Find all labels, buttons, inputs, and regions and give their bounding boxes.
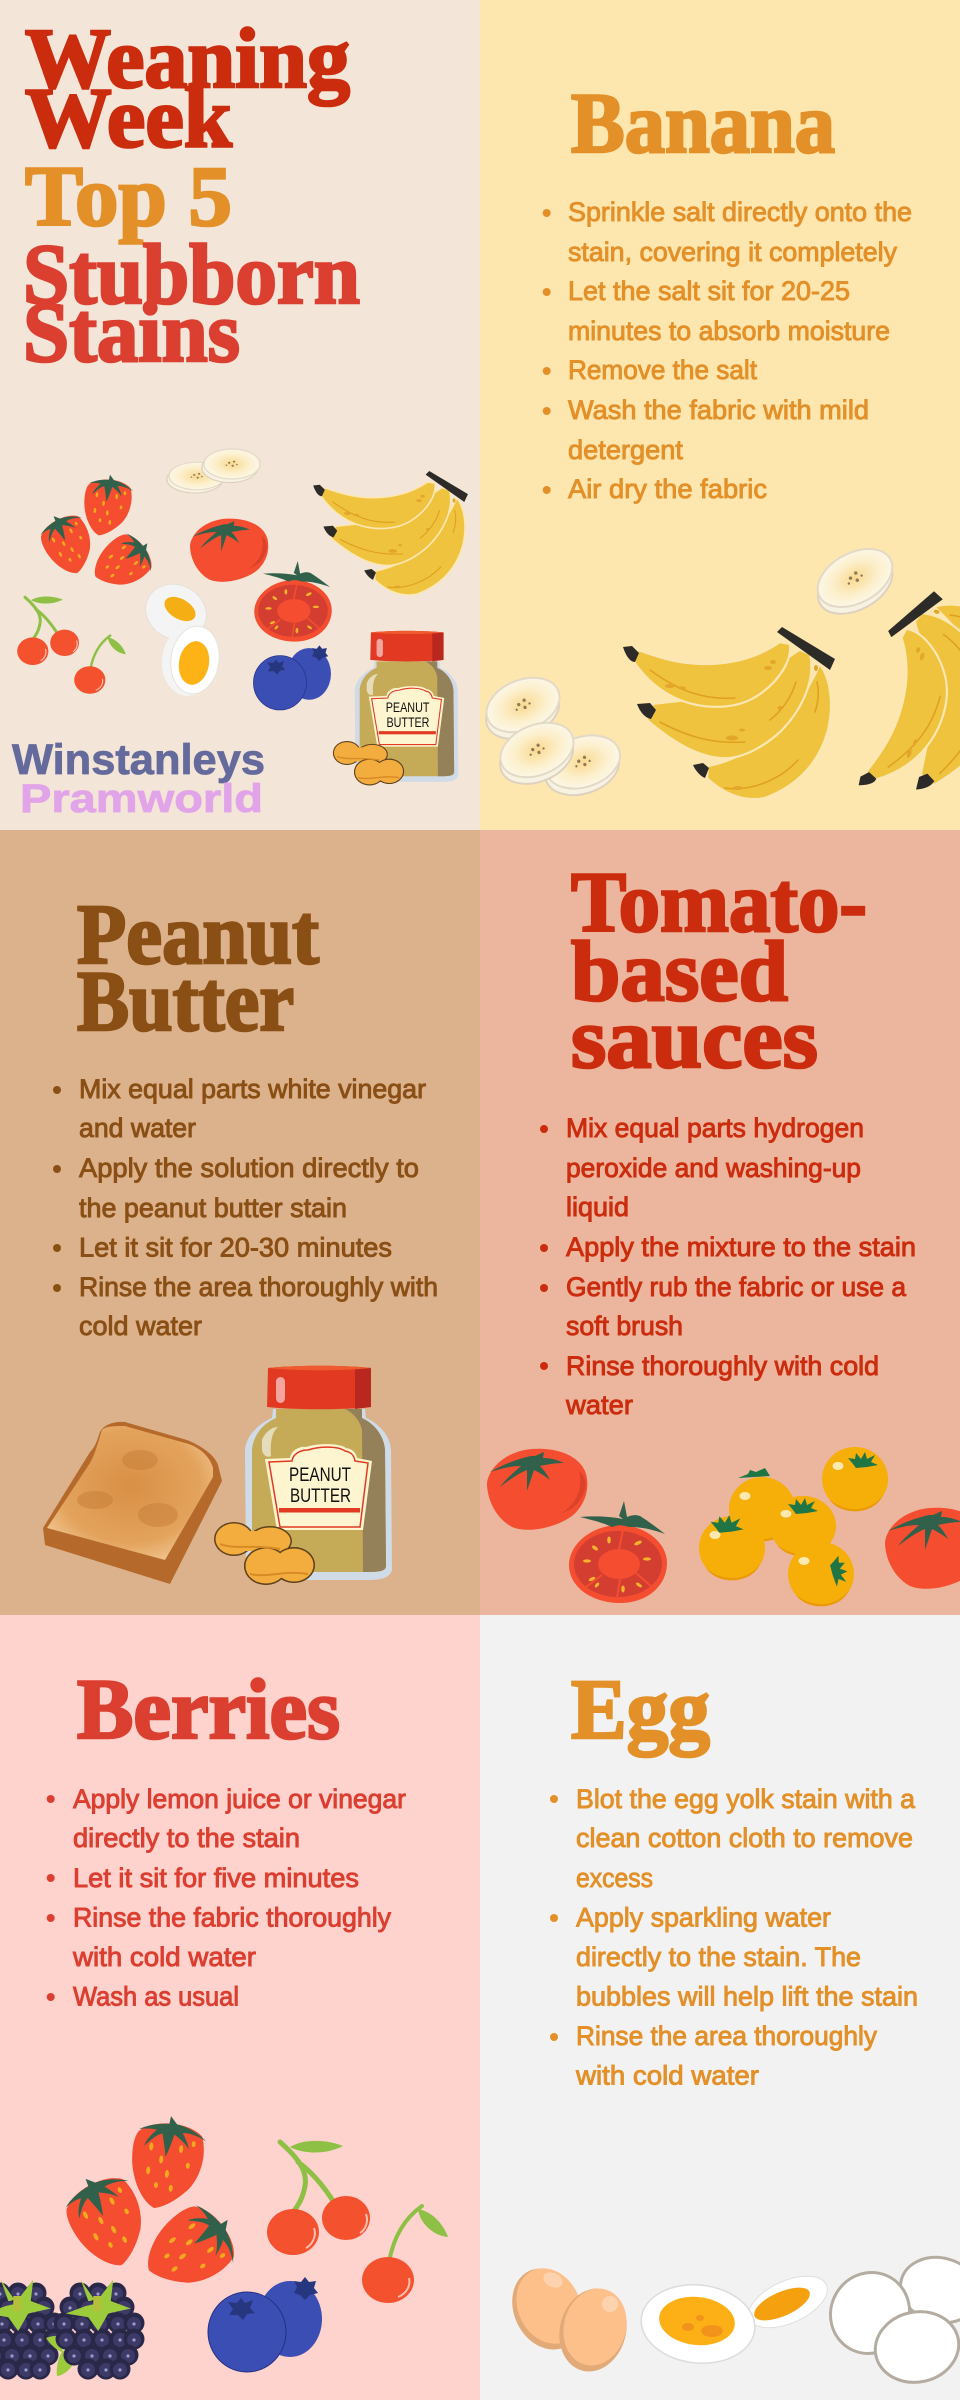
title: Stubborn Stains: Stubborn bbox=[23, 226, 360, 322]
panel: berries bbox=[0, 1615, 480, 2400]
icon: boiled eggs bbox=[136, 574, 223, 700]
list: banana steps: stain, covering it completely bbox=[568, 237, 898, 267]
list: tomato sauce steps: Mix equal parts hydrogen bbox=[566, 1113, 864, 1143]
heading: Peanut Butter: Peanut bbox=[77, 886, 319, 982]
list: egg steps: excess bbox=[576, 1863, 653, 1893]
heading: Tomato-based sauces: based bbox=[571, 923, 788, 1019]
icon: banana bunch bbox=[623, 627, 835, 799]
icon: strawberries bbox=[33, 473, 162, 600]
title: Weaning Week: Weaning bbox=[25, 10, 350, 106]
list: egg steps bbox=[550, 1784, 918, 2090]
panel: title bbox=[0, 0, 480, 830]
heading: Berries: Berries bbox=[77, 1661, 340, 1757]
list: banana steps bbox=[543, 197, 912, 504]
heading: Tomato-based sauces: Tomato- bbox=[571, 854, 867, 950]
list: berries steps: Rinse the fabric thoroughly bbox=[73, 1902, 392, 1932]
icon: peanut butter jar: BUTTER bbox=[386, 715, 430, 730]
icon: tomato cropped bbox=[885, 1508, 960, 1589]
list: egg steps: clean cotton cloth to remove bbox=[576, 1823, 913, 1853]
list: egg steps: with cold water bbox=[575, 2060, 759, 2090]
title: Stubborn Stains: Stains bbox=[23, 284, 240, 380]
list: banana steps: minutes to absorb moisture bbox=[568, 316, 890, 346]
title: Top 5: Top 5 bbox=[25, 148, 232, 244]
list: tomato sauce steps: liquid bbox=[566, 1192, 629, 1222]
list: tomato sauce steps: Apply the mixture to the stain bbox=[566, 1232, 916, 1262]
icon: blackberries bbox=[0, 2280, 144, 2380]
list: berries steps: Let it sit for five minutes bbox=[73, 1863, 359, 1893]
list: berries steps: with cold water bbox=[72, 1942, 256, 1972]
list: tomato sauce steps: peroxide and washing-up bbox=[566, 1153, 861, 1183]
title: Stubborn Stains bbox=[23, 226, 360, 380]
list: tomato sauce steps: Gently rub the fabric or use a bbox=[566, 1272, 906, 1302]
list: peanut butter steps: cold water bbox=[79, 1311, 202, 1341]
icon: tomato bbox=[190, 519, 268, 582]
heading: Tomato-based sauces: sauces bbox=[571, 990, 818, 1086]
list: peanut butter steps bbox=[53, 1074, 438, 1341]
panel: egg bbox=[480, 1615, 960, 2400]
list: peanut butter steps: Mix equal parts white vinegar bbox=[79, 1074, 426, 1104]
heading: Egg: Egg bbox=[571, 1661, 710, 1757]
icon: peanut butter jar bbox=[333, 631, 458, 785]
list: peanut butter steps: and water bbox=[79, 1113, 196, 1143]
list: berries steps: Wash as usual bbox=[73, 1982, 239, 2012]
icon: peanut butter jar: PEANUT bbox=[289, 1465, 351, 1486]
title: Weaning Week bbox=[25, 10, 350, 166]
list: banana steps: Remove the salt bbox=[568, 355, 758, 385]
icon: banana slices bbox=[476, 537, 905, 804]
list: egg steps: Rinse the area thoroughly bbox=[576, 2021, 878, 2051]
icon: peanut butter jar: BUTTER bbox=[290, 1486, 351, 1507]
list: peanut butter steps: Rinse the area thoroughly with bbox=[79, 1272, 438, 1302]
icon: blueberries bbox=[253, 645, 331, 710]
list: tomato sauce steps: water bbox=[565, 1390, 633, 1420]
icon: blueberries bbox=[208, 2277, 322, 2372]
list: tomato sauce steps: Rinse thoroughly with cold bbox=[566, 1351, 879, 1381]
list: peanut butter steps: the peanut butter stain bbox=[79, 1193, 347, 1223]
list: berries steps: Apply lemon juice or vinegar bbox=[73, 1784, 406, 1814]
logo: Winstanleys Pramworld bbox=[12, 736, 265, 821]
list: berries steps bbox=[47, 1784, 406, 2012]
icon: halved tomato bbox=[569, 1501, 667, 1603]
icon: cherries bbox=[267, 2141, 448, 2303]
panel: tomato-based sauces bbox=[480, 830, 960, 1615]
heading: Tomato-based sauces bbox=[571, 854, 867, 1086]
list: egg steps: directly to the stain. The bbox=[576, 1942, 861, 1972]
icon: yellow tomatoes bbox=[699, 1447, 888, 1606]
icon: tomato bbox=[487, 1449, 587, 1530]
list: peanut butter steps: Apply the solution directly to bbox=[79, 1153, 419, 1183]
list: berries steps: directly to the stain bbox=[73, 1823, 300, 1853]
icon: peanut butter jar bbox=[214, 1366, 392, 1585]
list: banana steps: detergent bbox=[568, 435, 684, 465]
title: Weaning Week: Week bbox=[25, 70, 232, 166]
icon: banana slices bbox=[167, 449, 260, 493]
icon: halved tomato bbox=[254, 561, 332, 642]
icon: halved boiled egg bbox=[637, 2266, 835, 2369]
list: tomato sauce steps bbox=[540, 1113, 916, 1420]
list: peanut butter steps: Let it sit for 20-30 minutes bbox=[79, 1232, 392, 1262]
logo: Winstanleys Pramworld: Winstanleys bbox=[12, 736, 265, 784]
list: banana steps: Air dry the fabric bbox=[568, 474, 767, 504]
icon: banana bunch cropped bbox=[840, 582, 960, 831]
logo: Winstanleys Pramworld: Pramworld bbox=[20, 777, 263, 821]
panel: peanut butter bbox=[0, 830, 480, 1615]
list: banana steps: Let the salt sit for 20-25 bbox=[568, 276, 850, 306]
list: egg steps: Apply sparkling water bbox=[576, 1902, 831, 1932]
list: tomato sauce steps: soft brush bbox=[566, 1311, 683, 1341]
list: banana steps: Sprinkle salt directly onto the bbox=[568, 197, 912, 227]
heading: Peanut Butter: Butter bbox=[77, 953, 294, 1049]
icon: cherries bbox=[17, 597, 126, 694]
icon: toast bbox=[43, 1422, 222, 1584]
icon: white eggs bbox=[816, 2249, 960, 2390]
icon: strawberries bbox=[54, 2113, 250, 2306]
heading: Peanut Butter bbox=[77, 886, 319, 1049]
heading: Banana: Banana bbox=[571, 75, 835, 171]
icon: banana bunch bbox=[313, 471, 468, 595]
icon: peanut butter jar: PEANUT bbox=[386, 700, 429, 715]
list: egg steps: Blot the egg yolk stain with a bbox=[576, 1784, 915, 1814]
icon: brown eggs bbox=[499, 2257, 636, 2379]
panel: banana bbox=[476, 0, 960, 831]
list: banana steps: Wash the fabric with mild bbox=[568, 395, 869, 425]
list: egg steps: bubbles will help lift the stain bbox=[576, 1982, 918, 2012]
